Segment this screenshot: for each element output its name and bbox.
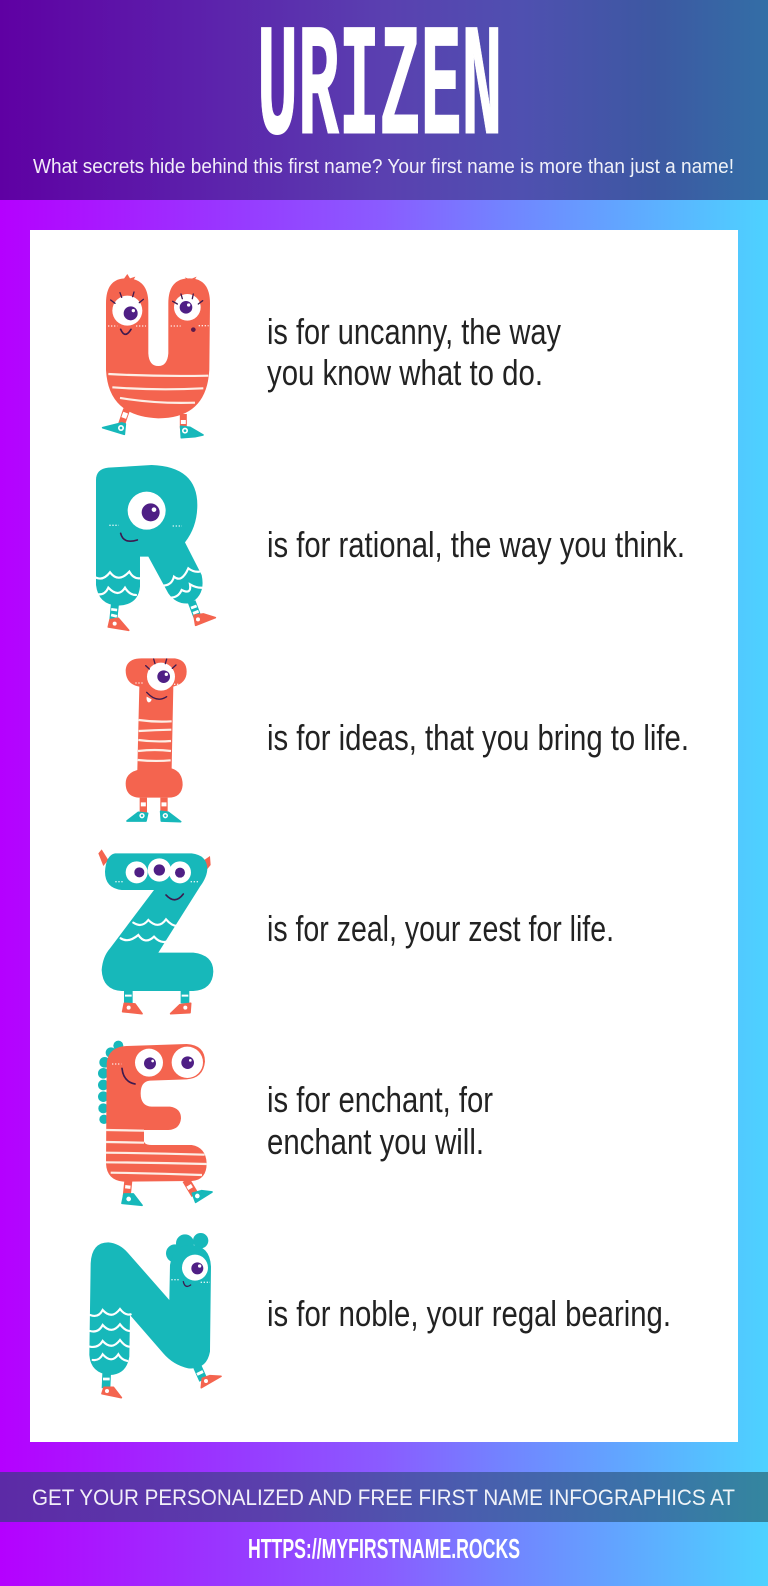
Z blush bbox=[115, 880, 199, 884]
U shoe eyelets bbox=[118, 425, 188, 434]
N eye bbox=[182, 1255, 208, 1281]
R blush bbox=[109, 523, 182, 528]
I blush bbox=[135, 683, 179, 684]
text: E line 1: is for enchant, for bbox=[267, 1079, 493, 1120]
I eye bbox=[147, 663, 175, 691]
I smile bbox=[147, 692, 167, 699]
Z smile bbox=[166, 894, 183, 900]
U leg stripes bbox=[124, 413, 183, 424]
U smile bbox=[121, 329, 131, 334]
U legs bbox=[122, 409, 183, 428]
E shoes bbox=[122, 1191, 212, 1205]
U body bbox=[106, 278, 210, 418]
letter R monster bbox=[96, 465, 215, 630]
E eyes bbox=[135, 1047, 203, 1078]
E crest bbox=[98, 1041, 123, 1124]
I stripes bbox=[138, 720, 172, 761]
R shoes bbox=[108, 614, 215, 630]
header band bbox=[0, 0, 768, 200]
footer band bbox=[0, 1472, 768, 1522]
letter U monster bbox=[103, 274, 210, 438]
N body bbox=[89, 1242, 211, 1375]
N blush bbox=[171, 1280, 210, 1282]
E smile bbox=[122, 1068, 135, 1084]
I leg stripes bbox=[143, 802, 164, 806]
N leg stripes bbox=[106, 1372, 201, 1380]
R shoe eyelets bbox=[113, 617, 200, 626]
U blush bbox=[108, 324, 209, 328]
R smile bbox=[121, 533, 137, 541]
I tooth bbox=[147, 697, 152, 702]
I legs bbox=[143, 798, 164, 813]
R waves bbox=[96, 568, 203, 598]
subtitle: What secrets hide behind this first name? Your first name is more than just a name! bbox=[33, 156, 734, 178]
text: U line 2: you know what to do. bbox=[267, 352, 543, 393]
Z shoes bbox=[123, 1003, 191, 1014]
E blush bbox=[112, 1062, 121, 1066]
R legs bbox=[113, 602, 197, 620]
Z leg stripes bbox=[128, 995, 185, 997]
E leg stripes bbox=[128, 1185, 191, 1189]
U eyes bbox=[112, 294, 201, 326]
title: URIZEN bbox=[257, 0, 502, 181]
footer call to action: GET YOUR PERSONALIZED AND FREE FIRST NAME INFOGRAPHICS AT bbox=[32, 1485, 735, 1510]
footer url: HTTPS://MYFIRSTNAME.ROCKS bbox=[248, 1533, 520, 1564]
I lashes bbox=[146, 659, 176, 669]
letter Z monster bbox=[98, 849, 213, 1014]
E body bbox=[106, 1044, 207, 1182]
N waves bbox=[90, 1309, 131, 1361]
N crest bbox=[166, 1233, 208, 1262]
U mouth bbox=[191, 327, 196, 332]
Z shoe eyelets bbox=[127, 1006, 187, 1010]
text: N line: is for noble, your regal bearing. bbox=[267, 1293, 671, 1334]
letter E monster bbox=[98, 1041, 212, 1205]
E legs bbox=[127, 1180, 195, 1197]
R body bbox=[96, 465, 203, 606]
N shoes bbox=[102, 1376, 221, 1398]
I shoes bbox=[127, 811, 181, 822]
R leg stripes bbox=[114, 606, 196, 617]
E stripes bbox=[106, 1130, 207, 1175]
N smile bbox=[183, 1282, 191, 1286]
R eye bbox=[128, 492, 166, 530]
I eyelets bbox=[139, 813, 168, 818]
text: R line: is for rational, the way you think. bbox=[267, 524, 685, 565]
U shoes bbox=[103, 423, 203, 438]
letter I monster bbox=[126, 658, 187, 822]
N shoe eyelets bbox=[105, 1379, 208, 1393]
E shoe eyelets bbox=[126, 1194, 200, 1201]
text: U line 1: is for uncanny, the way bbox=[267, 311, 561, 352]
Z waves bbox=[121, 919, 177, 942]
text: E line 2: enchant you will. bbox=[267, 1121, 484, 1162]
I body bbox=[126, 658, 187, 798]
Z eyes bbox=[126, 858, 191, 883]
letter N monster bbox=[89, 1233, 221, 1398]
U stripes bbox=[108, 374, 208, 403]
text: Z line: is for zeal, your zest for life. bbox=[267, 908, 614, 949]
U lashes bbox=[111, 292, 203, 304]
panel: white letters panel bbox=[30, 230, 738, 1442]
N legs bbox=[106, 1367, 203, 1388]
Z body bbox=[102, 853, 213, 991]
Z horns bbox=[98, 849, 211, 871]
U tufts bbox=[117, 274, 197, 283]
Z legs bbox=[128, 990, 185, 1003]
